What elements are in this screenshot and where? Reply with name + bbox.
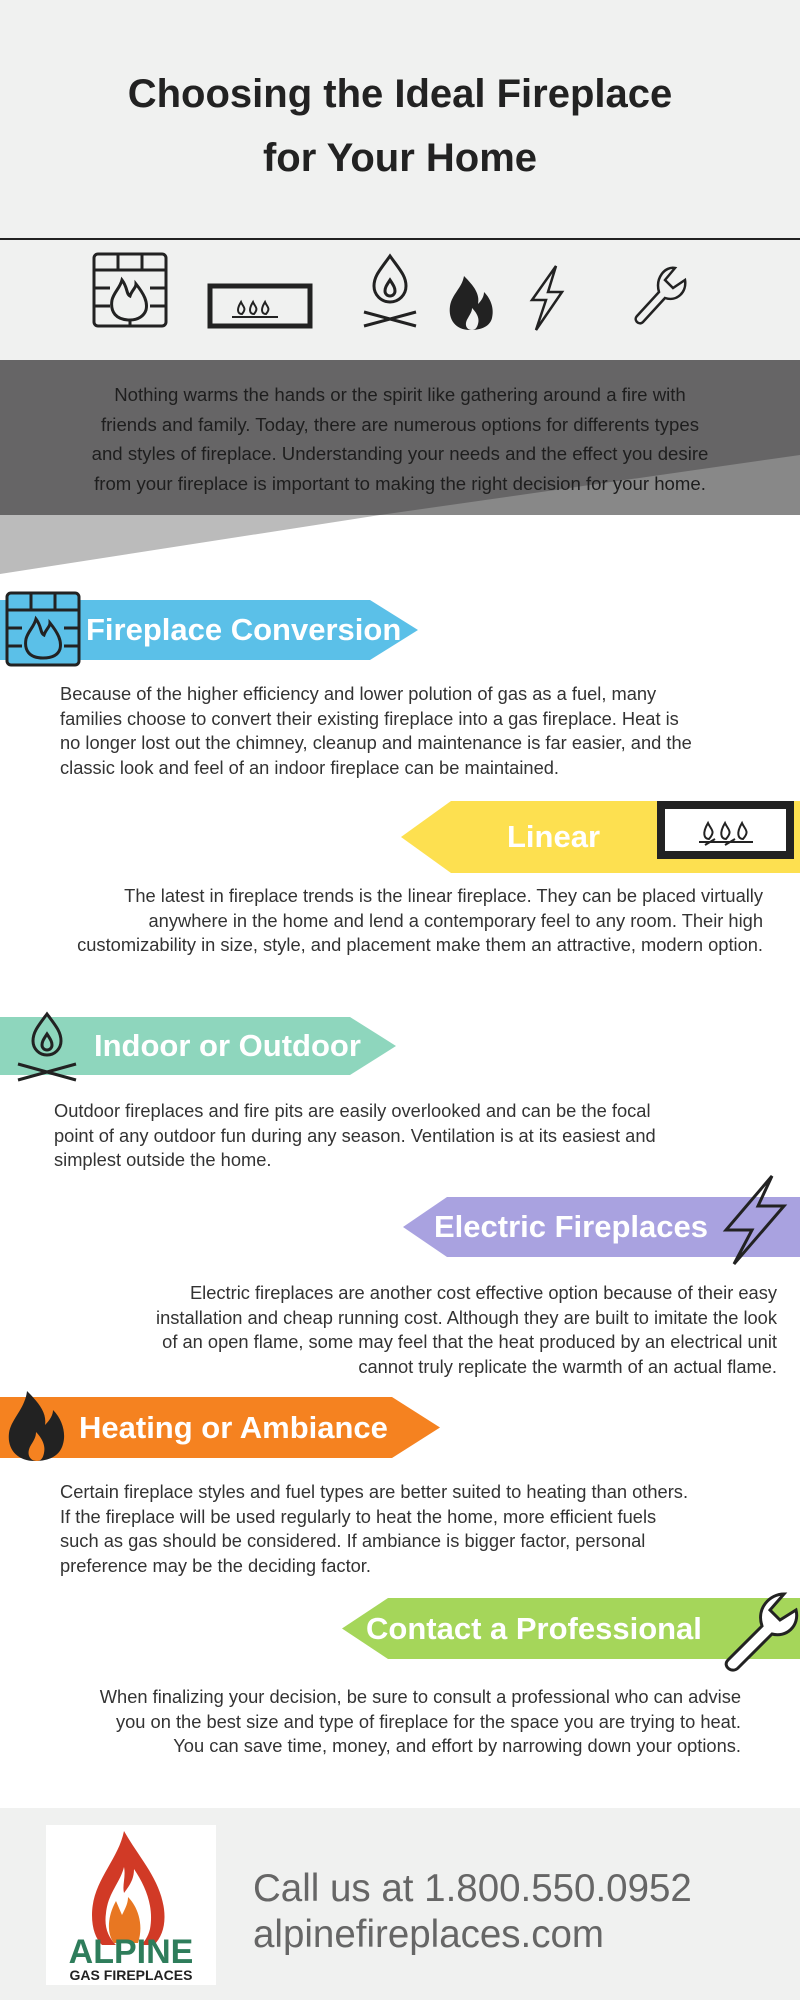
banner [342,1598,800,1659]
header background [0,0,800,360]
footer [0,1808,800,2000]
banner: Linear [507,819,600,854]
text: preference may be the deciding factor. [60,1554,371,1576]
icon: flame [8,1391,64,1461]
icon: linear fireplace [210,286,310,326]
logo [46,1825,216,1985]
text [60,1481,688,1576]
section: heating or ambiance [0,1391,688,1576]
icon: brick fireplace [6,592,80,666]
banner [0,1017,396,1075]
text: You can save time, money, and effort by narrowing down your options. [173,1735,741,1756]
icon: flame [450,276,493,330]
text [60,683,692,778]
banner: Fireplace Conversion [86,612,401,647]
banner: Indoor or Outdoor [94,1028,361,1063]
text [77,885,763,955]
text [156,1282,777,1377]
logo: GAS FIREPLACES [70,1967,192,1983]
text: Because of the higher efficiency and lower polution of gas as a fuel, many [60,683,656,704]
banner [0,600,418,660]
logo: ALPINE [69,1933,193,1971]
text: When finalizing your decision, be sure to consult a professional who can advise [100,1686,741,1707]
section: electric fireplaces [156,1175,800,1377]
title: Choosing the Ideal Fireplace [128,72,672,116]
banner [0,1397,440,1458]
banner [403,1197,800,1257]
text [100,1686,741,1756]
text: of an open flame, some may feel that the heat produced by an electrical unit [162,1331,777,1352]
section: contact a professional [100,1592,800,1756]
icon: lightning [532,266,562,330]
icon: wrench [636,268,685,323]
text: Electric fireplaces are another cost effective option because of their easy [190,1282,777,1303]
title [128,72,672,180]
icon: campfire [18,1012,76,1082]
icon: brick fireplace [94,254,166,326]
section: linear [77,801,800,955]
icon: wrench [724,1592,798,1672]
text: families choose to convert their existing fireplace into a gas fireplace. Heat is [60,708,679,728]
icon: campfire [364,256,416,326]
text: The latest in fireplace trends is the linear fireplace. They can be placed virtually [124,885,763,906]
text: classic look and feel of an indoor fireplace can be maintained. [60,756,559,778]
banner [401,801,800,873]
text: If the fireplace will be used regularly to heat the home, more efficient fuels [60,1506,656,1526]
intro text: Nothing warms the hands or the spirit like gathering around a fire with [114,384,686,405]
section: fireplace conversion [0,592,692,778]
text: Outdoor fireplaces and fire pits are easily overlooked and can be the focal [54,1100,651,1121]
text: no longer lost out the chimney, cleanup and maintenance is far easier, and the [60,732,692,753]
text: anywhere in the home and lend a contemporary feel to any room. Their high [149,910,763,930]
icon row [92,252,686,331]
text: cannot truly replicate the warmth of an actual flame. [358,1356,777,1376]
icon: lightning [722,1175,788,1265]
banner: Heating or Ambiance [79,1410,388,1444]
text: point of any outdoor fun during any season. Ventilation is at its easiest and [54,1124,656,1146]
contact text: alpinefireplaces.com [253,1913,604,1956]
contact text [253,1867,692,1956]
intro text: from your fireplace is important to making the right decision for your home. [94,472,706,494]
intro panel [0,360,800,574]
intro text: friends and family. Today, there are numerous options for differents types [101,414,699,434]
text: Certain fireplace styles and fuel types are better suited to heating than others. [60,1481,688,1502]
text: simplest outside the home. [54,1149,271,1170]
title: for Your Home [263,136,537,180]
text: customizability in size, style, and placement make them an attractive, modern option. [77,934,763,955]
icon: linear fireplace [657,801,794,859]
contact text: Call us at 1.800.550.0952 [253,1867,692,1910]
banner: Electric Fireplaces [434,1209,708,1244]
text: installation and cheap running cost. Although they are built to imitate the look [156,1306,777,1328]
banner: Contact a Professional [366,1610,702,1646]
section: indoor or outdoor [0,1012,656,1170]
text: such as gas should be considered. If ambiance is bigger factor, personal [60,1530,645,1551]
text: you on the best size and type of fireplace for the space you are trying to heat. [116,1710,741,1732]
intro text: and styles of fireplace. Understanding your needs and the effect you desire [92,443,708,464]
text [54,1100,656,1170]
intro text [92,384,708,494]
